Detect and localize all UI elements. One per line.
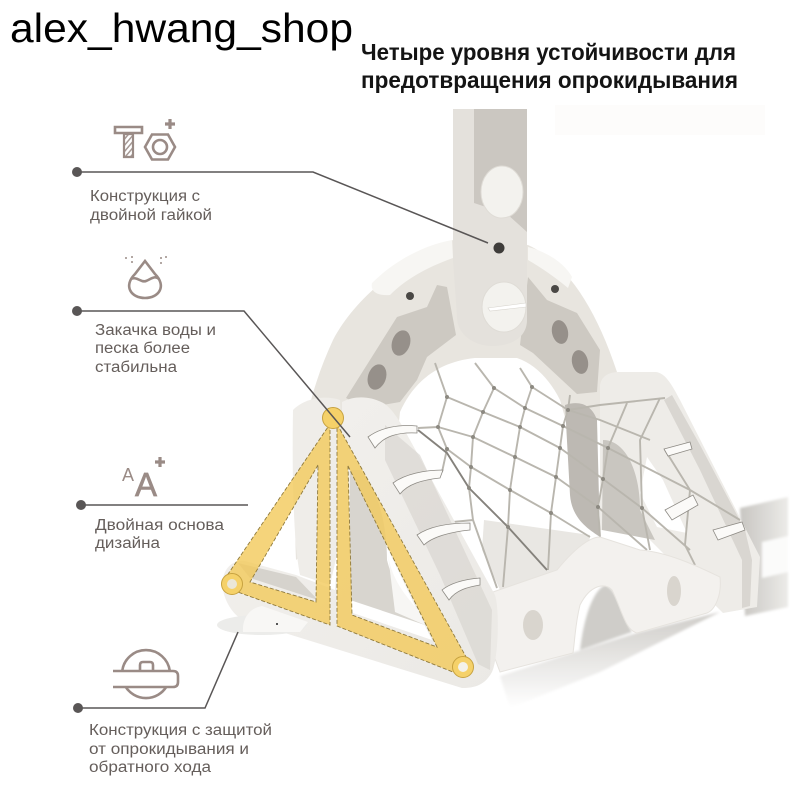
icon: bolt and nut bbox=[115, 119, 175, 160]
icon: letters A A plus: A bbox=[135, 466, 157, 503]
title bbox=[361, 39, 738, 93]
cut-out interior gray bbox=[350, 470, 425, 625]
callout 2: water and sand fill bbox=[72, 257, 350, 437]
rear leg inner shade bbox=[602, 440, 655, 540]
arch recess left bbox=[346, 285, 456, 408]
icon: letters A A plus bbox=[122, 457, 165, 503]
straps on front piece bbox=[368, 425, 745, 600]
label 2: стабильна bbox=[95, 359, 177, 376]
callout 4: anti-tip and anti-reverse bbox=[73, 632, 272, 776]
node right bbox=[452, 656, 474, 678]
arch screws bbox=[406, 285, 559, 300]
lower knob bbox=[482, 282, 526, 332]
icon: water drop bbox=[125, 257, 167, 298]
base holes bbox=[523, 576, 681, 640]
floor shadows bbox=[500, 497, 788, 708]
right side of body gray stripe bbox=[385, 425, 492, 670]
net cords bbox=[418, 363, 740, 588]
arch back frame bbox=[295, 240, 617, 560]
icon: anti-tip wheel bbox=[113, 650, 178, 698]
label 4: от опрокидывания и bbox=[89, 741, 249, 758]
left arm top shading bbox=[238, 563, 318, 600]
dark rear arm bbox=[565, 403, 600, 537]
label 2 bbox=[95, 322, 216, 376]
product illustration: stand with net bbox=[217, 109, 788, 708]
front base piece bbox=[488, 537, 720, 672]
main triangle body bbox=[222, 397, 498, 688]
label 4: обратного хода bbox=[89, 759, 211, 776]
arch caps bbox=[372, 240, 453, 295]
faint background patch bbox=[555, 105, 765, 135]
label 2: Закачка воды и bbox=[95, 322, 216, 339]
label 3: Двойная основа bbox=[95, 517, 224, 534]
rear leg stripe bbox=[664, 395, 752, 608]
stability triangle left (yellow) bbox=[224, 424, 330, 625]
node left bbox=[222, 574, 242, 594]
node top bbox=[322, 408, 344, 428]
arch holes bbox=[364, 319, 590, 392]
left arm bbox=[293, 398, 345, 585]
upper knob bbox=[481, 166, 523, 218]
floor panel behind net bbox=[482, 520, 590, 590]
title: Четыре уровня устойчивости для bbox=[361, 39, 736, 65]
callout 1: double nut bbox=[72, 119, 488, 243]
suction foot bbox=[217, 606, 308, 635]
cut-out white gap bbox=[388, 555, 425, 625]
callout 3: double base bbox=[76, 457, 248, 552]
right rear leg bbox=[600, 372, 760, 613]
arch recess right bbox=[520, 277, 600, 394]
post screw bbox=[494, 242, 504, 254]
label 1: Конструкция с bbox=[90, 188, 200, 205]
leader line 1 bbox=[72, 167, 488, 243]
post shaded upper part bbox=[474, 109, 527, 232]
label 3 bbox=[95, 517, 224, 552]
icon: letters A A plus: A bbox=[122, 465, 134, 485]
label 1: двойной гайкой bbox=[90, 207, 212, 224]
label 3: дизайна bbox=[95, 535, 160, 552]
label 2: песка более bbox=[95, 340, 190, 357]
stability triangle right (yellow) bbox=[337, 424, 470, 676]
label 1 bbox=[90, 188, 212, 224]
opening in rear leg bbox=[640, 457, 687, 533]
watermark heading: alex_hwang_shop bbox=[10, 5, 353, 51]
net opening bbox=[385, 358, 600, 560]
title: предотвращения опрокидывания bbox=[361, 67, 738, 93]
upright post bbox=[453, 109, 527, 346]
leader line 3 bbox=[76, 500, 248, 510]
leader line 2 bbox=[72, 306, 350, 437]
leader line 4 bbox=[73, 632, 238, 713]
label 4 bbox=[89, 722, 272, 776]
net knots bbox=[436, 385, 644, 529]
label 4: Конструкция с защитой bbox=[89, 722, 272, 739]
